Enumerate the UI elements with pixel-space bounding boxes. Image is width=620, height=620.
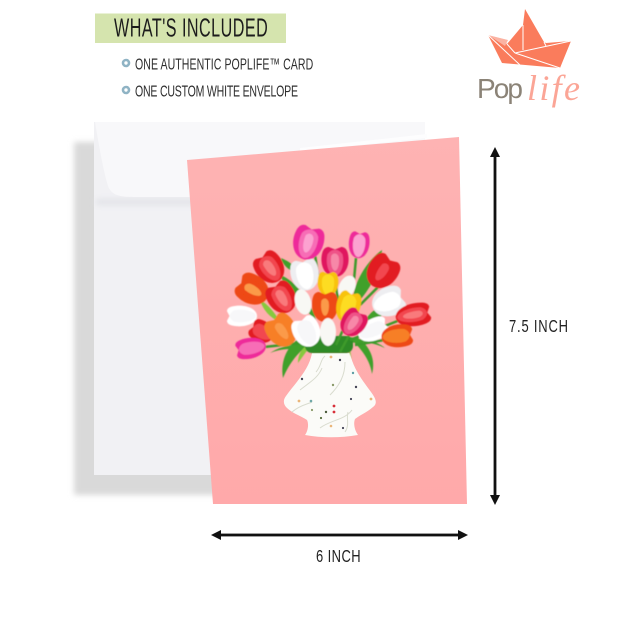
- tulip: white lower right: [354, 314, 392, 346]
- tulip: white center: [288, 313, 326, 351]
- spray: white center: [320, 318, 336, 346]
- card back edge: [300, 134, 427, 151]
- tulip: white back: [288, 257, 322, 293]
- tulip: red orange left: [232, 269, 274, 311]
- arrow: width: [211, 530, 468, 540]
- label: height: 7.5 INCH: [509, 317, 568, 337]
- envelope body: [94, 122, 425, 475]
- tulip: yellow right: [332, 289, 364, 325]
- card front: [187, 137, 467, 504]
- arrow: height: [490, 147, 500, 505]
- vase floral pattern: [292, 356, 372, 432]
- logo: poplife: [477, 9, 580, 108]
- tulip: pink center: [335, 305, 371, 341]
- tulip: red right: [360, 250, 404, 294]
- tulip: red orange right: [380, 323, 414, 349]
- tulip: crimson left: [262, 277, 302, 319]
- tulip: pink small: [348, 231, 370, 259]
- list: included items: [123, 55, 313, 100]
- tulip: red center: [312, 292, 338, 322]
- envelope with shadow: [74, 122, 425, 495]
- bouquet: [227, 223, 432, 378]
- tulip: orange: [261, 309, 303, 353]
- heading: what's included: WHAT'S INCLUDED: [114, 13, 268, 43]
- flower vase: [284, 353, 376, 437]
- label: width: 6 INCH: [316, 547, 361, 567]
- tulip: white far right: [368, 283, 408, 321]
- tulip: white far left: [227, 306, 257, 326]
- tulip: magenta top: [289, 223, 327, 263]
- card: [187, 134, 467, 504]
- envelope flap: [95, 122, 425, 197]
- wordmark: Pop: Pop: [477, 73, 523, 104]
- tulip: pink middle: [321, 247, 349, 277]
- envelope shadow: [74, 142, 224, 495]
- spray: white back: [335, 273, 359, 301]
- tulip: yellow back: [318, 272, 338, 296]
- item: authentic card: ONE AUTHENTIC POPLIFE™ CARD: [135, 55, 313, 73]
- tulips: [227, 223, 432, 361]
- wordmark: life: life: [527, 68, 580, 108]
- tulip: pink lower left: [234, 335, 268, 361]
- item: white envelope: ONE CUSTOM WHITE ENVELOPE: [135, 82, 298, 100]
- tulip: red far right: [394, 301, 432, 329]
- tulip: red left: [249, 247, 291, 289]
- icon: origami boat: [488, 9, 571, 68]
- leaves and stems: [255, 250, 400, 378]
- spray: white left: [292, 287, 314, 317]
- tulip: red behind orange: [246, 317, 278, 347]
